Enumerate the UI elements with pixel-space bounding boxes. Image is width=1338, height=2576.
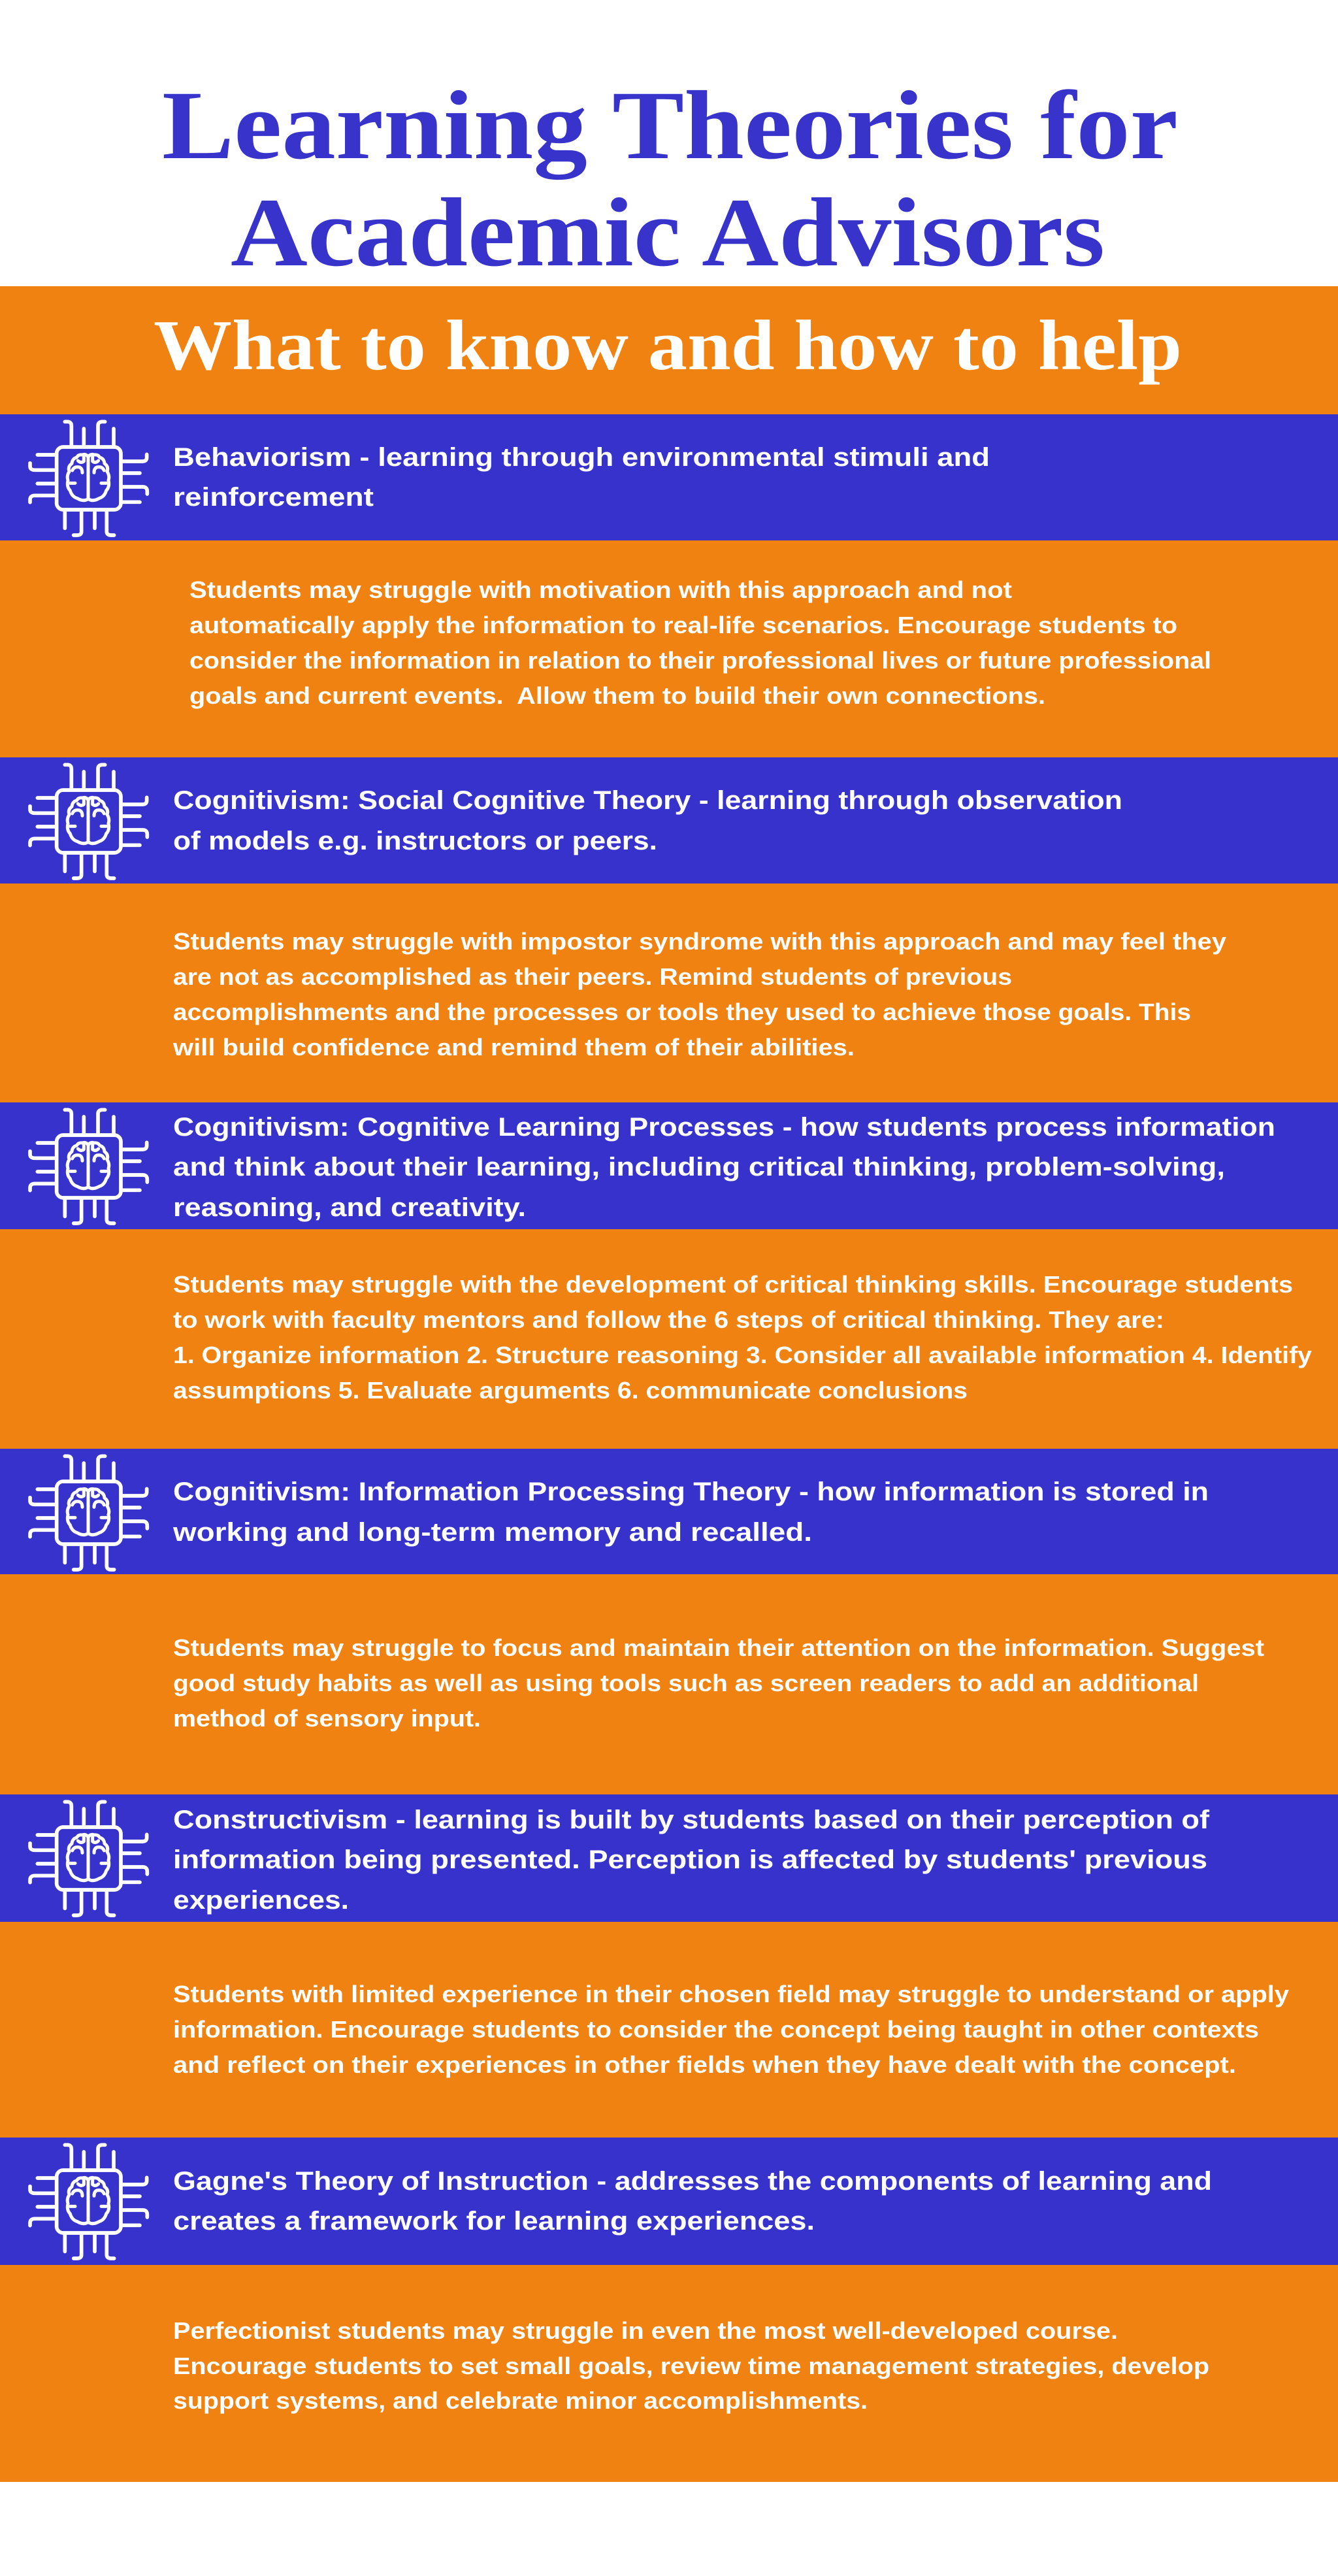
advice panel: Constructivism	[0, 1922, 1338, 2138]
subtitle banner: What to know and how to help	[154, 306, 1182, 385]
advice text: Information Processing Theory: good study habits as well as using tools such as screen readers to add an additional	[173, 1670, 1199, 1696]
advice text: Cognitive Learning Processes: assumptions 5. Evaluate arguments 6. communicate conclusions	[173, 1377, 968, 1404]
heading: Social Cognitive Theory: Cognitivism: Social Cognitive Theory - learning through observation	[173, 786, 1122, 815]
title: Learning Theories for	[162, 71, 1178, 180]
section: Information Processing Theory	[0, 1449, 1338, 1794]
icon: brain chip	[30, 1456, 147, 1570]
advice panel: Cognitive Learning Processes	[0, 1229, 1338, 1449]
advice text: Cognitive Learning Processes: Students may struggle with the development of critical thinking skills. Encourage students	[173, 1271, 1293, 1298]
heading: Gagne's Theory	[173, 2167, 1212, 2236]
advice text: Social Cognitive Theory: Students may struggle with impostor syndrome with this approach and may feel they	[173, 928, 1226, 955]
advice text: Behaviorism: Students may struggle with motivation with this approach and not	[189, 576, 1012, 603]
advice text: Constructivism	[173, 1981, 1289, 2078]
heading: Information Processing Theory: working and long-term memory and recalled.	[172, 1518, 812, 1547]
section: Behaviorism	[0, 414, 1338, 757]
advice text: Social Cognitive Theory: will build confidence and remind them of their abilities.	[172, 1034, 855, 1061]
advice text: Behaviorism: automatically apply the information to real-life scenarios. Encourage students to	[189, 612, 1177, 638]
header band: Social Cognitive Theory	[0, 757, 1338, 883]
icon: brain chip	[30, 2145, 147, 2258]
heading: Information Processing Theory: Cognitivism: Information Processing Theory - how information is stored in	[173, 1478, 1209, 1506]
advice text: Behaviorism: goals and current events. Allow them to build their own connections.	[189, 682, 1045, 709]
heading: Cognitive Learning Processes: reasoning, and creativity.	[173, 1193, 526, 1222]
advice text: Information Processing Theory: Students may struggle to focus and maintain their attention on the information. Suggest	[173, 1634, 1264, 1661]
advice panel: Behaviorism	[0, 540, 1338, 757]
heading: Constructivism: experiences.	[173, 1886, 349, 1915]
heading: Constructivism: Constructivism - learning is built by students based on their perception of	[173, 1806, 1210, 1834]
advice panel: Social Cognitive Theory	[0, 883, 1338, 1102]
header band: Gagne's Theory	[0, 2138, 1338, 2265]
icon: brain chip	[30, 1110, 147, 1223]
header band: Behaviorism	[0, 414, 1338, 540]
heading: Gagne's Theory: Gagne's Theory of Instruction - addresses the components of learning and	[173, 2167, 1212, 2196]
section: Cognitive Learning Processes	[0, 1102, 1338, 1449]
advice text: Information Processing Theory	[173, 1634, 1264, 1732]
advice text: Behaviorism: consider the information in relation to their professional lives or future professional	[189, 647, 1211, 674]
subtitle banner	[0, 286, 1338, 414]
advice panel: Information Processing Theory	[0, 1574, 1338, 1794]
icon: brain chip	[30, 421, 147, 535]
advice text: Constructivism: and reflect on their experiences in other fields when they have dealt with the concept.	[173, 2051, 1236, 2078]
heading: Cognitive Learning Processes: Cognitivism: Cognitive Learning Processes - how students process information	[173, 1113, 1275, 1142]
advice text: Social Cognitive Theory: are not as accomplished as their peers. Remind students of previous	[173, 963, 1012, 990]
section: Constructivism	[0, 1794, 1338, 2138]
advice text: Gagne's Theory: Encourage students to set small goals, review time management strategies, develop	[173, 2353, 1209, 2379]
advice text: Social Cognitive Theory: accomplishments and the processes or tools they used to achieve those goals. This	[173, 999, 1191, 1025]
heading: Behaviorism	[173, 443, 990, 512]
heading: Social Cognitive Theory: of models e.g. instructors or peers.	[173, 827, 657, 855]
heading: Gagne's Theory: creates a framework for learning experiences.	[173, 2207, 815, 2236]
title	[162, 71, 1178, 287]
advice text: Social Cognitive Theory	[172, 928, 1226, 1061]
icon: brain chip	[30, 765, 147, 878]
icon: brain chip	[30, 1802, 147, 1915]
heading: Constructivism: information being presented. Perception is affected by students' previous	[173, 1845, 1207, 1874]
header band: Information Processing Theory	[0, 1449, 1338, 1574]
header band: Constructivism	[0, 1794, 1338, 1922]
section: Gagne's Theory of Instruction	[0, 2138, 1338, 2482]
advice text: Constructivism: Students with limited experience in their chosen field may struggle to understand or apply	[173, 1981, 1289, 2007]
title: Academic Advisors	[231, 178, 1105, 287]
heading: Cognitive Learning Processes	[173, 1113, 1275, 1222]
heading: Behaviorism: reinforcement	[173, 483, 374, 512]
advice text: Behaviorism	[189, 576, 1211, 709]
advice text: Gagne's Theory: Perfectionist students may struggle in even the most well-developed course.	[173, 2317, 1118, 2344]
heading: Social Cognitive Theory	[173, 786, 1122, 855]
advice text: Cognitive Learning Processes: to work with faculty mentors and follow the 6 steps of critical thinking. They are:	[173, 1306, 1164, 1333]
heading: Cognitive Learning Processes: and think about their learning, including critical thinking, problem-solving,	[173, 1153, 1225, 1181]
advice text: Gagne's Theory: support systems, and celebrate minor accomplishments.	[173, 2387, 868, 2414]
advice text: Cognitive Learning Processes	[173, 1271, 1312, 1404]
heading: Behaviorism: Behaviorism - learning through environmental stimuli and	[173, 443, 990, 472]
advice panel: Gagne's Theory	[0, 2265, 1338, 2482]
heading: Constructivism	[173, 1806, 1210, 1915]
section: Social Cognitive Theory	[0, 757, 1338, 1102]
header band: Cognitive Learning Processes	[0, 1102, 1338, 1229]
advice text: Cognitive Learning Processes: 1. Organize information 2. Structure reasoning 3. Consider all available information 4. Identify	[173, 1342, 1312, 1368]
advice text: Gagne's Theory	[173, 2317, 1209, 2414]
advice text: Constructivism: information. Encourage students to consider the concept being taught in other contexts	[173, 2016, 1259, 2043]
heading: Information Processing Theory	[172, 1478, 1209, 1547]
advice text: Information Processing Theory: method of sensory input.	[173, 1705, 481, 1732]
